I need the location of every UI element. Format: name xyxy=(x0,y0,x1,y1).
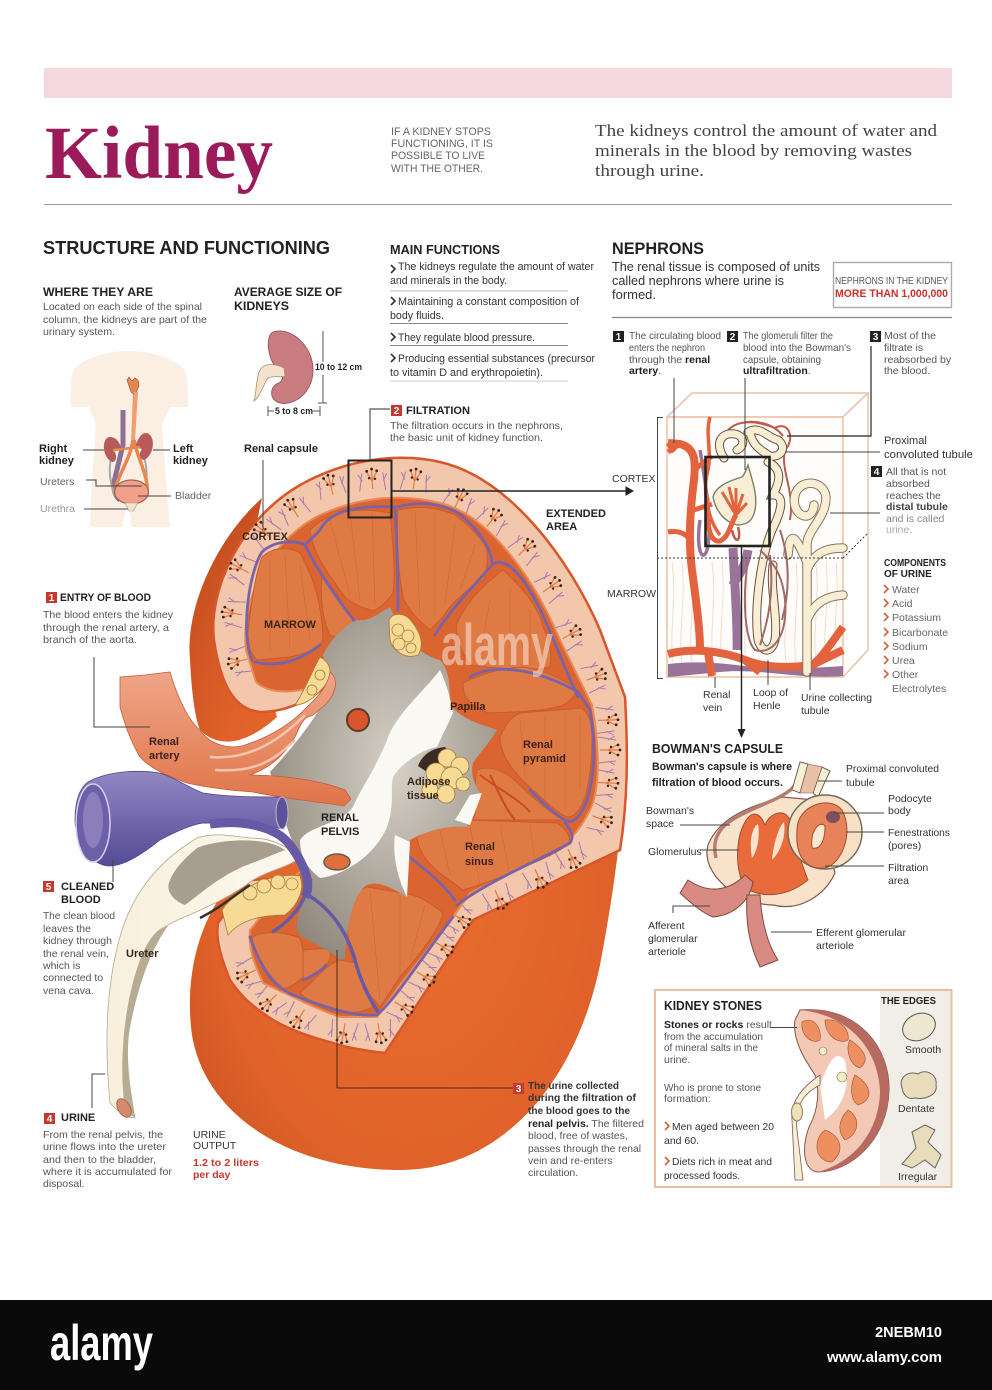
dark cavity xyxy=(418,747,455,774)
entry of blood: branch of the aorta. xyxy=(43,634,137,646)
extended area label xyxy=(546,508,606,533)
cortex and marrow labels xyxy=(607,473,656,600)
stone: smooth xyxy=(898,1008,941,1056)
anatomy labels: Renal xyxy=(523,739,553,751)
entry of blood: through the renal artery, a xyxy=(43,622,169,634)
bowman's labels: Glomerulus xyxy=(648,846,702,858)
where they are text: urinary system. xyxy=(43,326,115,338)
where they are text: column, the kidneys are part of the xyxy=(43,314,207,326)
bowman's labels: arteriole xyxy=(648,946,686,958)
step 4: urine. xyxy=(886,524,912,536)
cleaned blood: 5 xyxy=(46,882,52,893)
bowman's labels: Afferent xyxy=(648,920,685,932)
bowman's labels: Fenestrations xyxy=(888,827,950,839)
average size heading xyxy=(234,285,342,313)
urine xyxy=(42,1074,173,1190)
urine: URINE xyxy=(61,1112,95,1124)
step 4 xyxy=(871,466,948,536)
step 2: blood into the Bowman's xyxy=(743,342,851,354)
pyramid striations xyxy=(270,512,580,1000)
filtration text xyxy=(390,405,563,444)
side note: POSSIBLE TO LIVE xyxy=(391,150,485,162)
intro text: through urine. xyxy=(595,161,704,180)
small blood vessels xyxy=(347,709,369,731)
urine output xyxy=(193,1129,259,1181)
bowman's labels xyxy=(646,763,950,958)
nephrons count box xyxy=(834,262,952,308)
step 2 xyxy=(727,330,851,377)
size kidney icon: 10 to 12 cm xyxy=(315,362,362,373)
main functions: They regulate blood pressure. xyxy=(398,332,535,344)
block lower labels: Henle xyxy=(753,700,781,712)
anatomy labels: sinus xyxy=(465,856,494,868)
body labels: Urethra xyxy=(40,503,75,515)
nephrons heading: NEPHRONS xyxy=(612,239,704,258)
main functions: The kidneys regulate the amount of water xyxy=(398,261,594,273)
nephrons heading: called nephrons where urine is xyxy=(612,274,784,288)
proximal tubule label xyxy=(884,435,973,461)
main functions: Producing essential substances (precursor xyxy=(398,353,595,365)
filtration text: 2 xyxy=(394,406,400,417)
intro text xyxy=(595,121,938,180)
nephron block diagram xyxy=(657,393,868,678)
panel: kidney stones: Stones or rocks result xyxy=(664,1019,772,1031)
anatomy labels: RENAL xyxy=(321,812,359,824)
body labels: Right xyxy=(39,443,67,455)
components of urine: COMPONENTS xyxy=(884,558,946,569)
components of urine: Other xyxy=(892,669,919,681)
panel: kidney stones: Men aged between 20 xyxy=(672,1121,774,1133)
components of urine: OF URINE xyxy=(884,569,932,580)
step 4: 4 xyxy=(874,467,880,478)
step 3 xyxy=(870,330,952,377)
main kidney illustration xyxy=(75,458,627,1170)
step 3 collected urine: the blood goes to the xyxy=(528,1105,630,1117)
main functions: and minerals in the body. xyxy=(390,275,507,287)
block lower labels: Renal xyxy=(703,689,730,701)
bowman's labels: Filtration xyxy=(888,862,928,874)
main functions xyxy=(390,242,595,381)
panel: kidney stones: Who is prone to stone xyxy=(664,1082,761,1094)
vessels in lower pyramid xyxy=(480,775,530,820)
step 3: reabsorbed by xyxy=(884,354,952,366)
step 2: The glomeruli filter the xyxy=(743,330,833,342)
panel: kidney stones: and 60. xyxy=(664,1135,699,1147)
anatomy labels: Papilla xyxy=(450,701,486,713)
panel: kidney stones: THE EDGES xyxy=(881,995,936,1007)
cleaned blood: connected to xyxy=(43,972,103,984)
where they are text: WHERE THEY ARE xyxy=(43,285,153,299)
bowman's labels: space xyxy=(646,818,674,830)
cortex tufts xyxy=(219,466,621,1047)
filtration text: the basic unit of kidney function. xyxy=(390,432,543,444)
step 3 collected urine: during the filtration of xyxy=(528,1092,636,1104)
urine: 4 xyxy=(47,1114,53,1125)
kidney stones cross-section xyxy=(770,1010,889,1180)
bowman's labels: area xyxy=(888,875,909,887)
step 3 collected urine: circulation. xyxy=(528,1167,578,1179)
cleaned blood: kidney through xyxy=(43,935,112,947)
where they are text xyxy=(43,285,207,338)
cleaned blood: which is xyxy=(42,960,80,972)
stone: dentate: Dentate xyxy=(898,1103,935,1115)
step 2: ultrafiltration. xyxy=(743,365,811,377)
step 3 collected urine: renal pelvis. The filtered xyxy=(528,1118,644,1130)
footer bar xyxy=(0,1300,992,1390)
bowman's labels: arteriole xyxy=(816,940,854,952)
entry of blood: The blood enters the kidney xyxy=(43,609,174,621)
anatomy labels: Adipose xyxy=(407,776,450,788)
pyramids xyxy=(247,508,592,1013)
step 2: capsule, obtaining xyxy=(743,354,821,366)
step 1: artery. xyxy=(629,365,661,377)
step 3: 3 xyxy=(873,332,879,343)
urine: and then to the bladder, xyxy=(43,1154,156,1166)
bowman's labels: body xyxy=(888,805,912,817)
bowman's capsule heading: Bowman's capsule is where xyxy=(652,761,792,773)
step 1: enters the nephron xyxy=(629,342,705,354)
main functions: to vitamin D and erythropoietin). xyxy=(390,367,543,379)
step 4: absorbed xyxy=(886,478,930,490)
intro text: The kidneys control the amount of water and xyxy=(595,121,938,140)
step 4: distal tubule xyxy=(886,501,948,513)
cut face cortex xyxy=(213,458,627,1053)
step 3: Most of the xyxy=(884,330,936,342)
urine output: 1.2 to 2 liters xyxy=(193,1157,259,1169)
side note: IF A KIDNEY STOPS xyxy=(391,126,491,138)
step 3 collected urine: 3 xyxy=(516,1084,522,1095)
body labels: kidney xyxy=(173,455,209,467)
stone: irregular xyxy=(898,1125,941,1183)
side note xyxy=(391,126,493,175)
panel: kidney stones: of mineral salts in the xyxy=(664,1042,758,1054)
bowman's labels: tubule xyxy=(846,777,875,789)
panel: kidney stones: formation: xyxy=(664,1093,711,1105)
nephrons heading: The renal tissue is composed of units xyxy=(612,260,820,274)
step 4: reaches the xyxy=(886,490,941,502)
anatomy labels: Renal xyxy=(149,736,179,748)
bowman's labels: Podocyte xyxy=(888,793,932,805)
entry of blood xyxy=(43,592,174,727)
panel: kidney stones xyxy=(655,990,952,1187)
bowman's labels: (pores) xyxy=(888,840,921,852)
components of urine: Potassium xyxy=(892,612,941,624)
components of urine: Sodium xyxy=(892,641,928,653)
adipose fat lobes xyxy=(222,614,470,935)
size kidney icon: 5 to 8 cm xyxy=(275,406,313,417)
panel: kidney stones: from the accumulation xyxy=(664,1031,763,1043)
renal vein xyxy=(75,771,284,866)
body labels: kidney xyxy=(39,455,75,467)
urine: where it is accumulated for xyxy=(42,1166,173,1178)
anatomy labels: tissue xyxy=(407,790,439,802)
body diagram xyxy=(70,351,188,527)
step 3: filtrate is xyxy=(884,342,923,354)
footer bar: 2NEBM10 xyxy=(875,1325,942,1341)
renal sinus xyxy=(270,607,497,960)
main functions: body fluids. xyxy=(390,310,444,322)
side note: FUNCTIONING, IT IS xyxy=(391,138,493,150)
cleaned blood: vena cava. xyxy=(43,985,94,997)
arrow to bowman's capsule xyxy=(738,546,746,738)
components of urine: Urea xyxy=(892,655,915,667)
entry of blood: 1 xyxy=(49,593,55,604)
body labels: Left xyxy=(173,443,194,455)
footer bar: www.alamy.com xyxy=(826,1349,942,1366)
white pelvis xyxy=(300,670,482,897)
nephron leader lines xyxy=(674,346,880,690)
block lower labels: Urine collecting xyxy=(801,692,872,704)
step 1: 1 xyxy=(616,332,622,343)
panel: kidney stones: urine. xyxy=(664,1054,690,1066)
extended area label: EXTENDED xyxy=(546,508,606,520)
block lower labels: vein xyxy=(703,702,722,714)
block lower labels: Loop of xyxy=(753,687,788,699)
components of urine: Bicarbonate xyxy=(892,627,948,639)
nephrons count box: MORE THAN 1,000,000 xyxy=(835,288,948,300)
side note: WITH THE OTHER. xyxy=(391,163,483,175)
stone: smooth: Smooth xyxy=(905,1044,941,1056)
block lower labels xyxy=(703,687,872,717)
bowman's labels: Proximal convoluted xyxy=(846,763,939,775)
watermark: alamy xyxy=(441,613,553,678)
urine: urine flows into the ureter xyxy=(43,1141,167,1153)
components of urine: Electrolytes xyxy=(892,683,946,695)
components of urine xyxy=(884,558,948,695)
anatomy labels: Ureter xyxy=(126,948,159,960)
components of urine: Water xyxy=(892,584,920,596)
panel: kidney stones: processed foods. xyxy=(664,1170,740,1182)
step 2: 2 xyxy=(730,332,736,343)
filtration text: FILTRATION xyxy=(406,405,470,417)
renal capsule label xyxy=(244,443,318,530)
anatomy labels: MARROW xyxy=(264,619,317,631)
main functions: MAIN FUNCTIONS xyxy=(390,242,500,257)
body labels xyxy=(39,443,212,515)
urine: disposal. xyxy=(43,1178,84,1190)
step 3 collected urine: The urine collected xyxy=(528,1080,619,1092)
size kidney icon xyxy=(254,331,362,417)
renal artery xyxy=(120,672,351,806)
bowman's labels: Efferent glomerular xyxy=(816,927,907,939)
interlobar veins xyxy=(247,504,594,1015)
anatomy labels: pyramid xyxy=(523,753,566,765)
step 1 xyxy=(613,330,721,377)
filtration text: The filtration occurs in the nephrons, xyxy=(390,420,563,432)
anatomy labels xyxy=(126,531,566,960)
average size heading: KIDNEYS xyxy=(234,299,289,313)
entry of blood: ENTRY OF BLOOD xyxy=(60,592,151,604)
cleaned blood: The clean blood xyxy=(43,910,115,922)
body labels: Bladder xyxy=(175,490,212,502)
cleaned blood xyxy=(42,860,115,997)
ureter and pelvis xyxy=(107,835,297,1118)
anatomy labels: PELVIS xyxy=(321,826,359,838)
step 3 collected urine: vein and re-enters xyxy=(528,1155,613,1167)
bowman's labels: Bowman's xyxy=(646,805,694,817)
bowman's labels: glomerular xyxy=(648,933,698,945)
step 4: All that is not xyxy=(886,466,946,478)
step 1: through the renal xyxy=(629,354,710,366)
components of urine: Acid xyxy=(892,598,913,610)
cortex and marrow labels: CORTEX xyxy=(612,473,656,485)
section heading: STRUCTURE AND FUNCTIONING xyxy=(43,237,330,258)
panel: kidney stones: KIDNEY STONES xyxy=(664,998,762,1013)
anatomy labels: Renal xyxy=(465,841,495,853)
cleaned blood: BLOOD xyxy=(61,894,101,906)
cortex and marrow labels: MARROW xyxy=(607,588,656,600)
proximal tubule label: convoluted tubule xyxy=(884,449,973,461)
renal capsule label: Renal capsule xyxy=(244,443,318,455)
anatomy labels: artery xyxy=(149,750,180,762)
nephrons heading: formed. xyxy=(612,288,656,302)
urine: From the renal pelvis, the xyxy=(43,1129,163,1141)
footer bar: alamy xyxy=(50,1315,153,1371)
nephrons heading xyxy=(612,239,820,302)
medulla band xyxy=(245,498,598,1017)
cleaned blood: the renal vein, xyxy=(43,948,109,960)
block lower labels: tubule xyxy=(801,705,830,717)
step 3: the blood. xyxy=(884,365,930,377)
intro text: minerals in the blood by removing wastes xyxy=(595,141,912,160)
title: Kidney xyxy=(45,112,273,195)
urine output: OUTPUT xyxy=(193,1140,237,1152)
nephrons count box: NEPHRONS IN THE KIDNEY xyxy=(835,276,948,287)
step 1: The circulating blood xyxy=(629,330,721,342)
proximal tubule label: Proximal xyxy=(884,435,927,447)
bowman's capsule heading xyxy=(652,742,792,789)
bowman's capsule heading: filtration of blood occurs. xyxy=(652,777,783,789)
stone: irregular: Irregular xyxy=(898,1171,938,1183)
bowman's capsule diagram xyxy=(673,762,884,967)
bowman's capsule heading: BOWMAN'S CAPSULE xyxy=(652,742,783,756)
urine output: URINE xyxy=(193,1129,226,1141)
step 3 collected urine: blood, free of wastes, xyxy=(528,1130,628,1142)
body labels: Ureters xyxy=(40,476,74,488)
urine output: per day xyxy=(193,1169,231,1181)
step 4: and is called xyxy=(886,513,945,525)
where they are text: Located on each side of the spinal xyxy=(43,301,202,313)
panel: kidney stones: Diets rich in meat and xyxy=(672,1156,772,1168)
anatomy labels: CORTEX xyxy=(242,531,288,543)
average size heading: AVERAGE SIZE OF xyxy=(234,285,342,299)
stone: dentate xyxy=(898,1072,936,1115)
back surface of kidney xyxy=(189,498,625,1170)
extended area label: AREA xyxy=(546,521,577,533)
main functions: Maintaining a constant composition of xyxy=(398,296,580,308)
filtration highlight box and connector xyxy=(348,409,633,518)
header band xyxy=(44,68,952,98)
step 3 collected urine: passes through the renal xyxy=(528,1143,641,1155)
cleaned blood: leaves the xyxy=(43,923,91,935)
cleaned blood: CLEANED xyxy=(61,881,114,893)
step 3 collected urine xyxy=(337,950,644,1179)
